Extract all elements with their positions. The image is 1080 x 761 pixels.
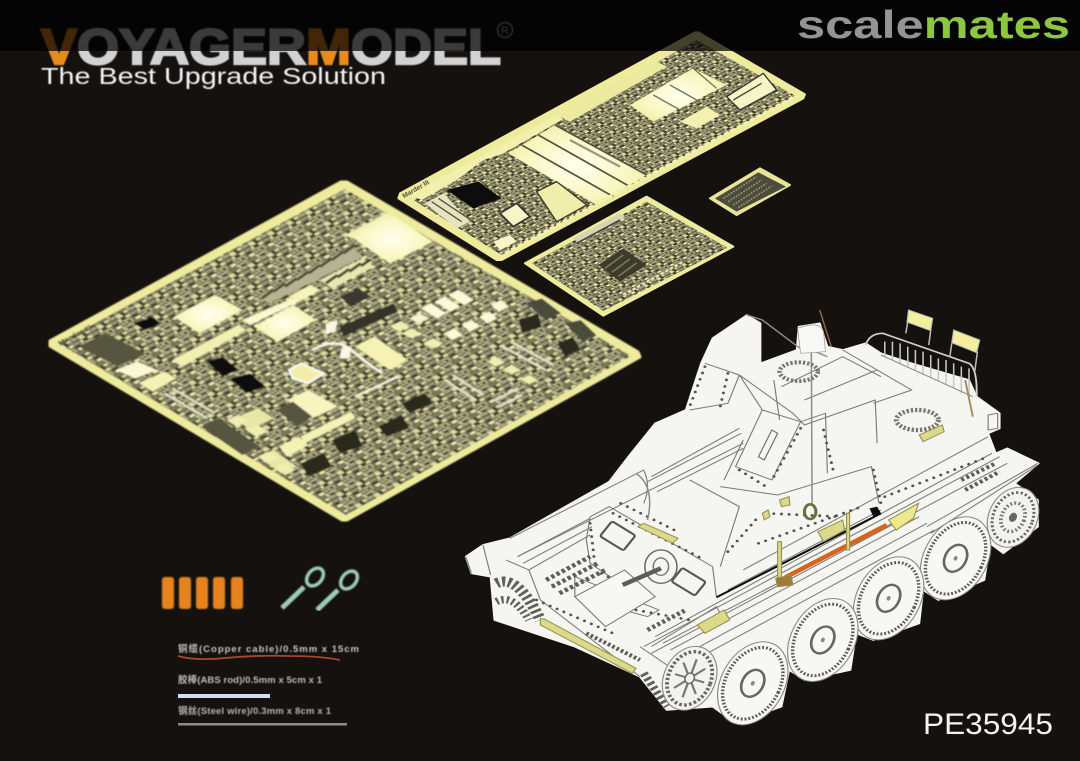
photo-etched yellow parts on hull [540,425,944,673]
steel wire label: 钢丝(Steel wire)/0.3mm x 8cm x 1 [178,705,332,717]
turret ring cogs [780,362,973,430]
brand logo: R [501,25,509,37]
scalemates watermark: scale mates [797,4,1070,47]
hull hatch slots [575,430,778,627]
orange resin cylinders [162,577,243,609]
front drive sprocket [653,640,726,716]
road wheel 1 [704,633,801,734]
road wheel 3 [840,548,937,649]
small pale grid cells [227,313,538,475]
engine vents and front track [496,463,1000,707]
black storage gap [716,507,881,597]
tank body silhouette [466,315,1039,723]
road wheel 4 [907,508,1004,609]
tagline: The Best Upgrade Solution [41,63,386,89]
ABS rod sample [178,694,270,698]
rear idler wheel [979,482,1047,553]
parts detail: dark etched blocks [79,288,596,477]
ABS rod label: 胶棒(ABS rod)/0.5mm x 5cm x 1 [178,674,323,686]
bow machine gun mount [623,550,677,585]
stamped fret label: Marder III [401,179,431,200]
parts detail: hatched strips [164,245,553,418]
periscope box and rear antenna mount [798,310,831,353]
antenna and wire rails [636,315,827,520]
small mesh fret [710,168,790,215]
copper cable sample [178,656,340,660]
rivet rows [537,367,988,633]
copper cable label: 铜缆(Copper cable)/0.5mm x 15cm [178,643,359,655]
hull and casemate lines [466,350,1038,677]
pale ladder slats [421,290,509,340]
parts detail: bright gaps [312,320,398,397]
dark top band [0,0,1080,51]
middle photo-etched fret [525,197,733,316]
brand logo: VOYAGER MODEL [41,19,501,75]
tank illustration [466,310,1047,734]
large photo-etched fret [50,182,640,520]
rear grille rack [866,333,977,397]
product code: PE35945 [923,708,1053,741]
mint metal tow eyelets [282,565,361,610]
upper photo-etched fret [398,32,805,260]
road wheel 2 [774,589,871,691]
dashed bottom edge strip [505,96,797,253]
rear crew seats with yellow pads [906,310,980,372]
steel wire sample [178,723,347,726]
orange cleaning rod [785,525,887,577]
stamped fret label: Marder III [56,323,94,348]
